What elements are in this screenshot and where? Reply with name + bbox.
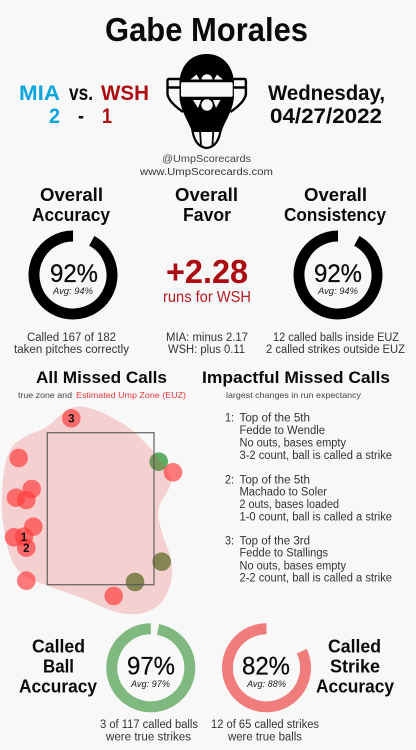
- panel: overall consistency: 2 called strikes outside EUZ: [266, 344, 405, 356]
- call 2: 2:: [225, 474, 234, 486]
- favor caption: MIA: minus 2.17: [166, 332, 248, 344]
- game score: 2: [49, 105, 60, 128]
- call 1: Fedde to Wendle: [240, 425, 325, 437]
- panel: overall consistency: Consistency: [284, 205, 386, 225]
- heading: impactful missed calls: [202, 368, 390, 400]
- call 2: Machado to Soler: [240, 487, 327, 499]
- heading: all missed calls: Estimated Ump Zone (EUZ): [76, 390, 186, 400]
- panel: overall accuracy: Avg: 94%: [52, 286, 93, 296]
- call 3: [225, 535, 392, 585]
- consistency value: 92%: [314, 260, 362, 288]
- panel: called strike accuracy: Avg: 88%: [246, 679, 286, 689]
- strike caption: 12 of 65 called strikes: [211, 719, 319, 731]
- accuracy value: 92%: [50, 260, 98, 288]
- call 3: No outs, bases empty: [240, 560, 346, 572]
- panel: overall favor: Favor: [183, 205, 231, 225]
- heading: all missed calls: [18, 368, 186, 400]
- panel: called strike accuracy: Strike: [330, 657, 380, 677]
- call 3: Fedde to Stallings: [240, 548, 328, 560]
- title: Gabe Morales: [105, 11, 308, 48]
- call 2: 2 outs, bases loaded: [240, 499, 339, 511]
- panel: overall accuracy: [14, 185, 129, 356]
- accuracy caption: Called 167 of 182: [27, 332, 116, 344]
- ball ring: [105, 622, 196, 713]
- strike ring: [215, 616, 318, 720]
- panel: overall accuracy: Accuracy: [32, 205, 110, 225]
- game score: -: [78, 105, 84, 128]
- accuracy ring: [20, 222, 126, 328]
- ball caption: 3 of 117 called balls: [100, 719, 198, 731]
- list: impactful calls: [225, 413, 392, 585]
- panel: called ball accuracy: Avg: 97%: [130, 679, 170, 689]
- panel: overall favor: WSH: plus 0.11: [168, 344, 245, 356]
- chart: missed calls strike zone: [2, 406, 182, 614]
- panel: called strike accuracy: [211, 616, 394, 743]
- heading: all missed calls: true zone and: [18, 390, 72, 400]
- ball value: 97%: [127, 652, 175, 680]
- panel: called ball accuracy: Ball: [43, 657, 74, 677]
- panel: overall favor: runs for WSH: [163, 289, 251, 306]
- call 3: 3:: [225, 535, 234, 547]
- green missed balls: [149, 452, 168, 471]
- favor value: +2.28: [166, 253, 248, 290]
- panel: called strike accuracy: Accuracy: [316, 677, 394, 697]
- red missed strikes: [5, 409, 182, 605]
- panel: overall favor: [163, 185, 251, 356]
- credits: @UmpScorecards: [162, 153, 251, 165]
- pitch numbers: [21, 414, 75, 555]
- panel: called ball accuracy: Accuracy: [19, 677, 97, 697]
- call 3: 2-2 count, ball is called a strike: [240, 573, 392, 585]
- strike value: 82%: [242, 652, 290, 680]
- call 1: 1:: [225, 413, 234, 425]
- heading: Overall: [304, 185, 367, 205]
- heading: Overall: [175, 185, 238, 205]
- call 1: [225, 413, 392, 462]
- game date: [268, 82, 385, 128]
- heading: all missed calls: All Missed Calls: [36, 368, 167, 387]
- call 2: 1-0 count, ball is called a strike: [240, 511, 392, 523]
- call 3: Top of the 3rd: [240, 535, 310, 547]
- game date: 04/27/2022: [270, 105, 382, 128]
- game score: MIA: [19, 82, 60, 105]
- game score: [19, 82, 149, 128]
- panel: called strike accuracy: were true balls: [227, 731, 302, 743]
- credits: [139, 153, 273, 178]
- game score: WSH: [101, 82, 149, 105]
- call 2: [225, 474, 392, 523]
- estimated ump zone: [2, 406, 172, 614]
- icon: umpire mask: [168, 54, 246, 148]
- heading: Called: [32, 637, 85, 657]
- panel: overall consistency: [266, 185, 405, 356]
- pitch numbers: 3: [68, 414, 75, 426]
- heading: impactful missed calls: largest changes in run expectancy: [226, 390, 362, 400]
- panel: called ball accuracy: were true strikes: [105, 731, 191, 743]
- pitch numbers: 2: [23, 543, 30, 555]
- consistency ring: [285, 222, 391, 328]
- panel: overall consistency: Avg: 94%: [317, 286, 358, 296]
- heading: Called: [328, 637, 381, 657]
- consistency caption: 12 called balls inside EUZ: [273, 332, 399, 344]
- game date: Wednesday,: [268, 82, 385, 105]
- call 1: 3-2 count, ball is called a strike: [240, 450, 392, 462]
- call 1: No outs, bases empty: [240, 438, 346, 450]
- game score: vs.: [69, 82, 93, 105]
- pitch numbers: 1: [21, 532, 28, 544]
- credits: www.UmpScorecards.com: [139, 166, 273, 178]
- game score: 1: [102, 105, 112, 128]
- call 2: Top of the 5th: [240, 474, 310, 486]
- heading: Overall: [40, 185, 103, 205]
- panel: overall accuracy: taken pitches correctly: [14, 344, 129, 356]
- panel: called ball accuracy: [19, 622, 198, 743]
- heading: impactful missed calls: Impactful Missed Calls: [202, 368, 390, 387]
- true strike zone: [47, 433, 154, 585]
- call 1: Top of the 5th: [240, 413, 310, 425]
